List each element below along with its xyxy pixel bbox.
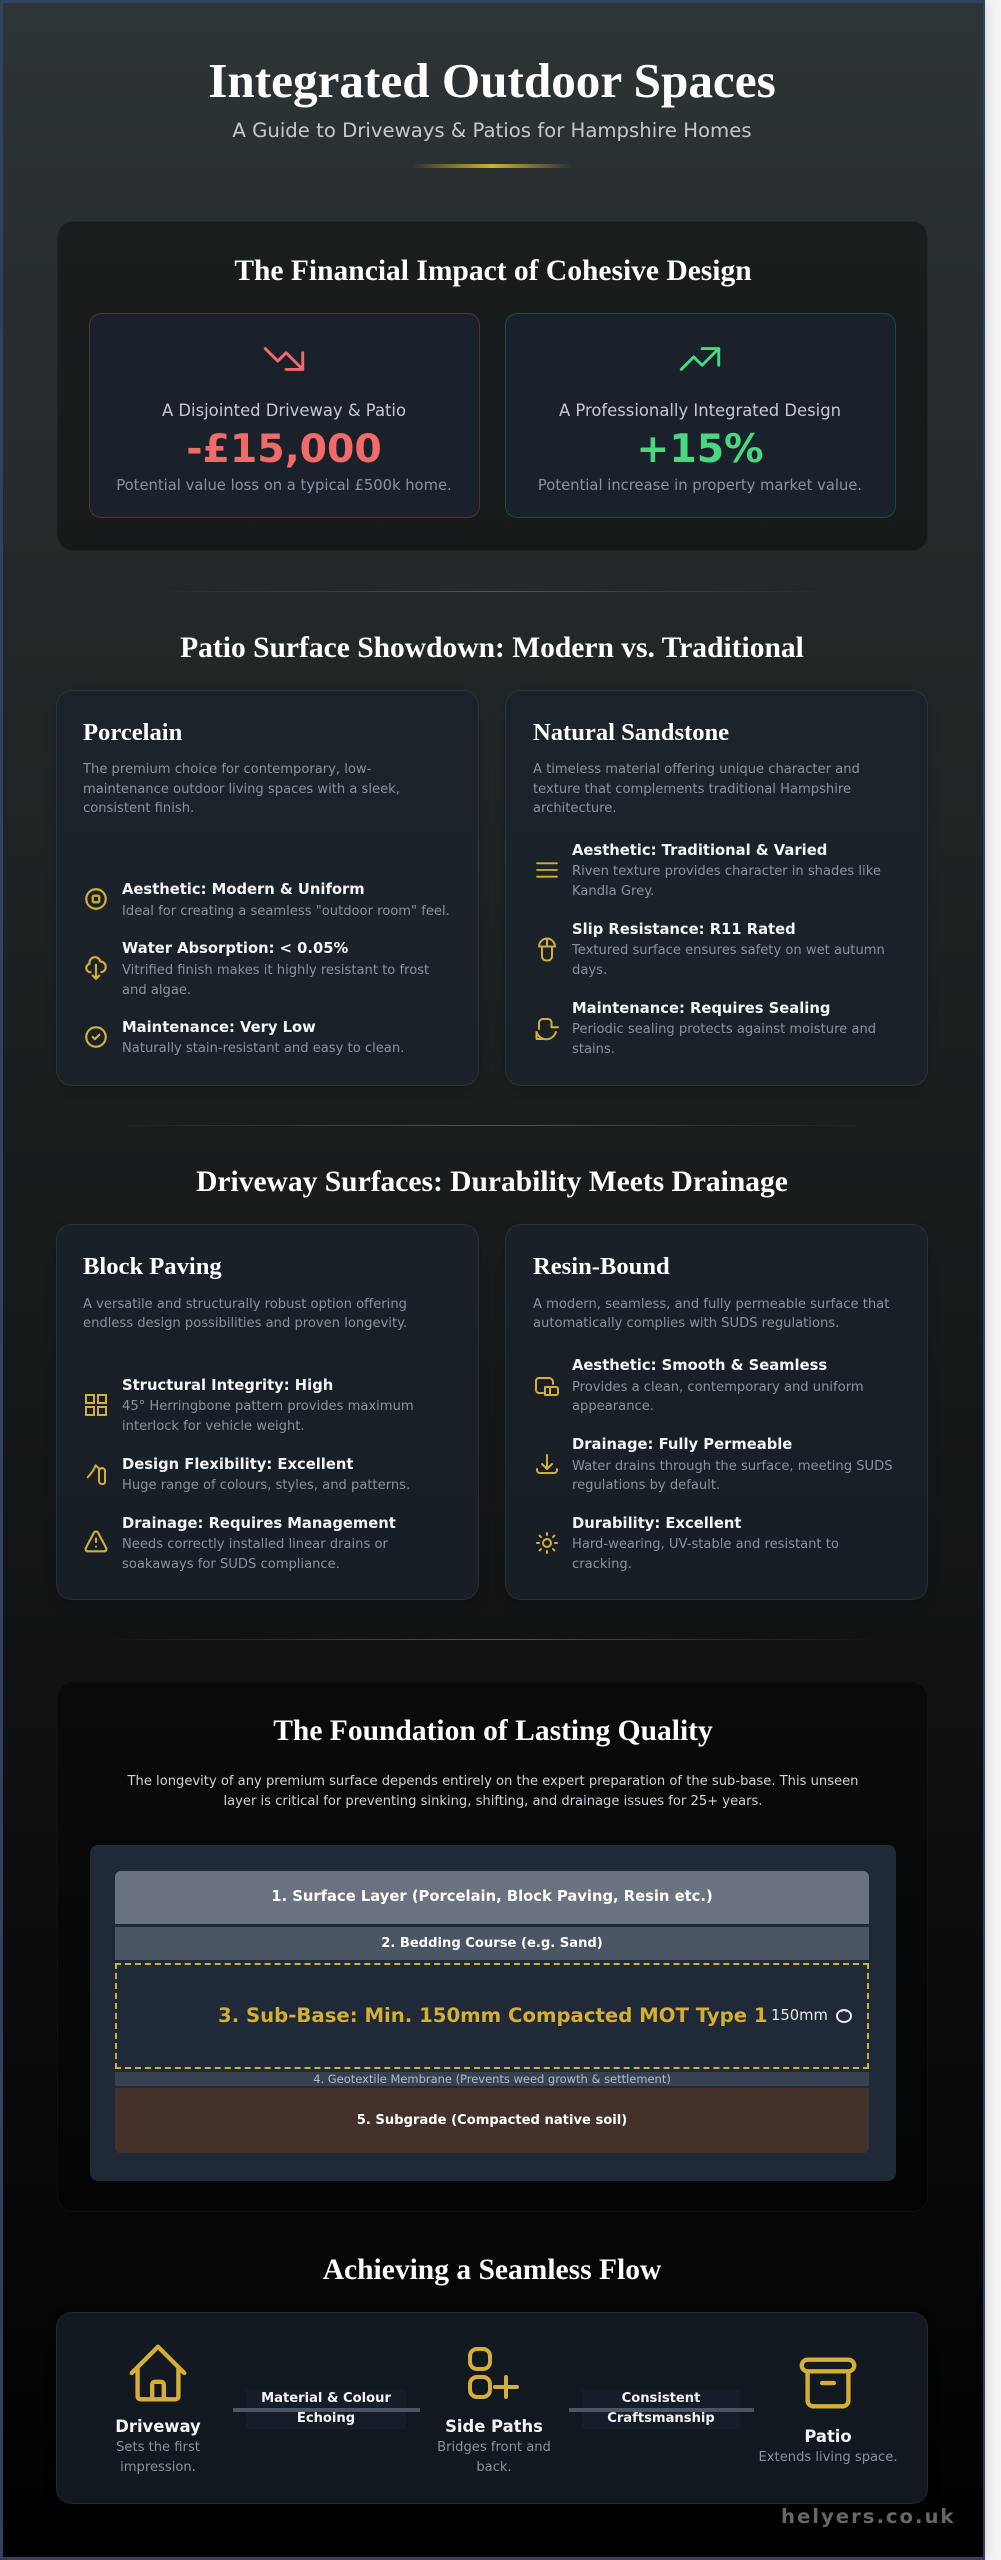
item: drainage: [536, 1436, 893, 1493]
item: aesthetic: Provides a clean, contemporary and uniform: [572, 1380, 864, 1395]
icon: lines: [536, 862, 558, 878]
item: maintenance: stains.: [572, 1042, 615, 1057]
layer 1: surface: 1. Surface Layer (Porcelain, Block Paving, Resin etc.): [271, 1888, 713, 1905]
description: automatically complies with SUDS regulations.: [533, 1316, 839, 1331]
panel: financial impact: [57, 221, 928, 551]
node: driveway: Sets the first: [116, 2440, 200, 2455]
heading: block paving: Block Paving: [83, 1253, 222, 1280]
item: aesthetic: Aesthetic: Traditional & Varied: [572, 842, 827, 859]
description: A timeless material offering unique character and: [533, 762, 860, 777]
icon: side paths: [468, 2347, 519, 2399]
heading: seamless flow: Achieving a Seamless Flow: [323, 2254, 661, 2286]
icon: cloud download: [85, 956, 107, 980]
item: structural integrity: Structural Integrity: High: [122, 1377, 333, 1394]
connector: material and colour echoing: [233, 2390, 420, 2429]
header: [208, 53, 776, 168]
layer 4: geotextile: [115, 2072, 869, 2086]
heading: porcelain: Porcelain: [83, 719, 182, 746]
connector: consistent craftsmanship: [569, 2390, 754, 2429]
node: patio: Extends living space.: [759, 2450, 897, 2465]
item: drainage: Drainage: Requires Management: [122, 1515, 396, 1532]
layer 5: subgrade: [115, 2088, 869, 2153]
description: A modern, seamless, and fully permeable surface that: [533, 1297, 889, 1312]
label: A Disjointed Driveway & Patio: [162, 401, 406, 420]
description: architecture.: [533, 801, 616, 816]
caption: Potential increase in property market value.: [538, 477, 862, 494]
item: slip resistance: [538, 921, 885, 978]
item: maintenance: [85, 1019, 404, 1056]
node: side paths: Side Paths: [445, 2417, 543, 2436]
node: patio: [759, 2358, 897, 2465]
heading: foundation: The Foundation of Lasting Quality: [273, 1715, 713, 1747]
icon: download: [536, 1454, 558, 1474]
item: aesthetic: [536, 842, 881, 899]
node: driveway: impression.: [120, 2460, 196, 2475]
item: durability: Durability: Excellent: [572, 1515, 741, 1532]
item: aesthetic: Ideal for creating a seamless "outdoor room" feel.: [122, 904, 450, 919]
item: water absorption: and algae.: [122, 983, 191, 998]
item: aesthetic: Kandla Grey.: [572, 884, 654, 899]
node: side paths: back.: [476, 2460, 512, 2475]
card: disjointed design: [89, 313, 480, 518]
item: aesthetic: Riven texture provides character in shades like: [572, 864, 881, 879]
item: design flexibility: Design Flexibility: Excellent: [122, 1456, 353, 1473]
connector: material and colour echoing: Echoing: [297, 2411, 355, 2426]
heading: driveway surfaces: Driveway Surfaces: Durability Meets Drainage: [196, 1166, 788, 1198]
item: aesthetic: [85, 881, 450, 919]
layer 2: bedding: [115, 1927, 869, 1960]
icon: trending down: [264, 347, 304, 371]
intro text: The longevity of any premium surface depends entirely on the expert preparation of the sub-base. This unseen: [128, 1774, 858, 1789]
connector: consistent craftsmanship: Craftsmanship: [607, 2411, 715, 2426]
subtitle: A Guide to Driveways & Patios for Hampshire Homes: [232, 119, 752, 142]
item: durability: Hard-wearing, UV-stable and resistant to: [572, 1537, 839, 1552]
item: drainage: soakaways for SUDS compliance.: [122, 1557, 340, 1572]
icon: home: [130, 2344, 186, 2402]
item: slip resistance: days.: [572, 963, 607, 978]
icon: warning: [84, 1530, 108, 1552]
item: aesthetic: Aesthetic: Modern & Uniform: [122, 881, 365, 898]
item: aesthetic: Aesthetic: Smooth & Seamless: [572, 1357, 827, 1374]
description: texture that complements traditional Hampshire: [533, 782, 851, 797]
connector: consistent craftsmanship: Consistent: [622, 2391, 700, 2406]
description: A versatile and structurally robust option offering: [83, 1297, 407, 1312]
item: maintenance: Maintenance: Requires Sealing: [572, 1000, 830, 1017]
item: slip resistance: Textured surface ensures safety on wet autumn: [572, 943, 885, 958]
panel: block paving: [56, 1224, 479, 1600]
description: maintenance outdoor living spaces with a sleek,: [83, 782, 400, 797]
value: -£15,000: [186, 426, 382, 472]
item: aesthetic: [535, 1357, 864, 1414]
panel: resin-bound: [505, 1224, 928, 1600]
node: patio: Patio: [804, 2427, 852, 2446]
card: integrated design: [505, 313, 896, 518]
item: structural integrity: [85, 1377, 414, 1434]
item: maintenance: [536, 1000, 876, 1057]
icon: grid: [85, 1394, 107, 1416]
description: [533, 762, 860, 816]
item: water absorption: Water Absorption: < 0.05%: [122, 940, 348, 957]
layer 3: sub-base: 150mm: [771, 2007, 828, 2024]
panel: foundation: [57, 1681, 928, 2212]
item: structural integrity: 45° Herringbone pattern provides maximum: [122, 1399, 414, 1414]
connector: material and colour echoing: Material & Colour: [261, 2391, 391, 2406]
item: water absorption: Vitrified finish makes it highly resistant to frost: [122, 963, 429, 978]
item: aesthetic: appearance.: [572, 1399, 654, 1414]
layer 3: sub-base: 3. Sub-Base: Min. 150mm Compacted MOT Type 1: [218, 2004, 768, 2027]
description: [82, 762, 400, 816]
item: design flexibility: Huge range of colours, styles, and patterns.: [122, 1478, 410, 1493]
item: water absorption: [85, 940, 429, 998]
item: durability: cracking.: [572, 1557, 632, 1572]
description: [83, 1297, 407, 1331]
description: [533, 1297, 890, 1331]
node: driveway: Driveway: [115, 2417, 201, 2436]
icon: gauge: [836, 2009, 852, 2023]
layer 5: subgrade: 5. Subgrade (Compacted native soil): [357, 2113, 627, 2128]
intro text: [127, 1774, 858, 1809]
caption: Potential value loss on a typical £500k home.: [116, 477, 452, 494]
heading: financial impact: The Financial Impact of Cohesive Design: [234, 255, 752, 287]
icon: slip: [538, 938, 556, 962]
item: maintenance: Periodic sealing protects against moisture and: [572, 1022, 876, 1037]
item: drainage: [84, 1515, 396, 1572]
intro text: layer is critical for preventing sinking, shifting, and drainage issues for 25+ years.: [223, 1794, 763, 1809]
icon: pointer: [86, 1464, 106, 1485]
item: durability: [536, 1515, 839, 1572]
icon: archive: [793, 2348, 863, 2418]
item: drainage: regulations by default.: [572, 1478, 720, 1493]
item: drainage: Water drains through the surface, meeting SUDS: [572, 1459, 893, 1474]
node: side paths: Bridges front and: [437, 2440, 551, 2455]
item: structural integrity: interlock for vehicle weight.: [122, 1419, 305, 1434]
panel: flow: [56, 2312, 928, 2504]
item: drainage: Drainage: Fully Permeable: [572, 1436, 792, 1453]
icon: stop circle: [85, 888, 107, 910]
value: +15%: [636, 426, 764, 472]
heading: patio showdown: Patio Surface Showdown: Modern vs. Traditional: [180, 632, 804, 664]
gold accent bar: [412, 164, 572, 168]
heading: resin-bound: Resin-Bound: [533, 1253, 670, 1280]
layer diagram: [90, 1845, 896, 2181]
item: design flexibility: [86, 1456, 410, 1493]
panel: natural sandstone: [505, 690, 928, 1086]
item: slip resistance: Slip Resistance: R11 Rated: [572, 921, 796, 938]
layer 3: sub-base: [115, 1963, 869, 2069]
heading: sandstone: Natural Sandstone: [533, 719, 729, 746]
footer brand: helyers.co.uk: [781, 2505, 955, 2528]
node: driveway: [115, 2344, 201, 2475]
icon: layers: [535, 1377, 559, 1396]
title: Integrated Outdoor Spaces: [208, 53, 776, 108]
icon: check circle: [85, 1026, 107, 1048]
description: consistent finish.: [83, 801, 194, 816]
layer 2: bedding: 2. Bedding Course (e.g. Sand): [381, 1936, 603, 1951]
item: maintenance: Naturally stain-resistant and easy to clean.: [122, 1041, 404, 1056]
node: side paths: [437, 2347, 551, 2475]
layer 4: geotextile: 4. Geotextile Membrane (Prevents weed growth & settlement): [313, 2072, 671, 2086]
layer 1: surface: [115, 1871, 869, 1924]
icon: refresh: [536, 1018, 559, 1040]
description: The premium choice for contemporary, low-: [83, 762, 371, 777]
item: drainage: Needs correctly installed linear drains or: [122, 1537, 388, 1552]
item: maintenance: Maintenance: Very Low: [122, 1019, 316, 1036]
icon: sun: [536, 1532, 558, 1554]
description: endless design possibilities and proven longevity.: [83, 1316, 407, 1331]
panel: porcelain: [56, 690, 479, 1086]
label: A Professionally Integrated Design: [559, 401, 841, 420]
icon: trending up: [680, 347, 720, 371]
